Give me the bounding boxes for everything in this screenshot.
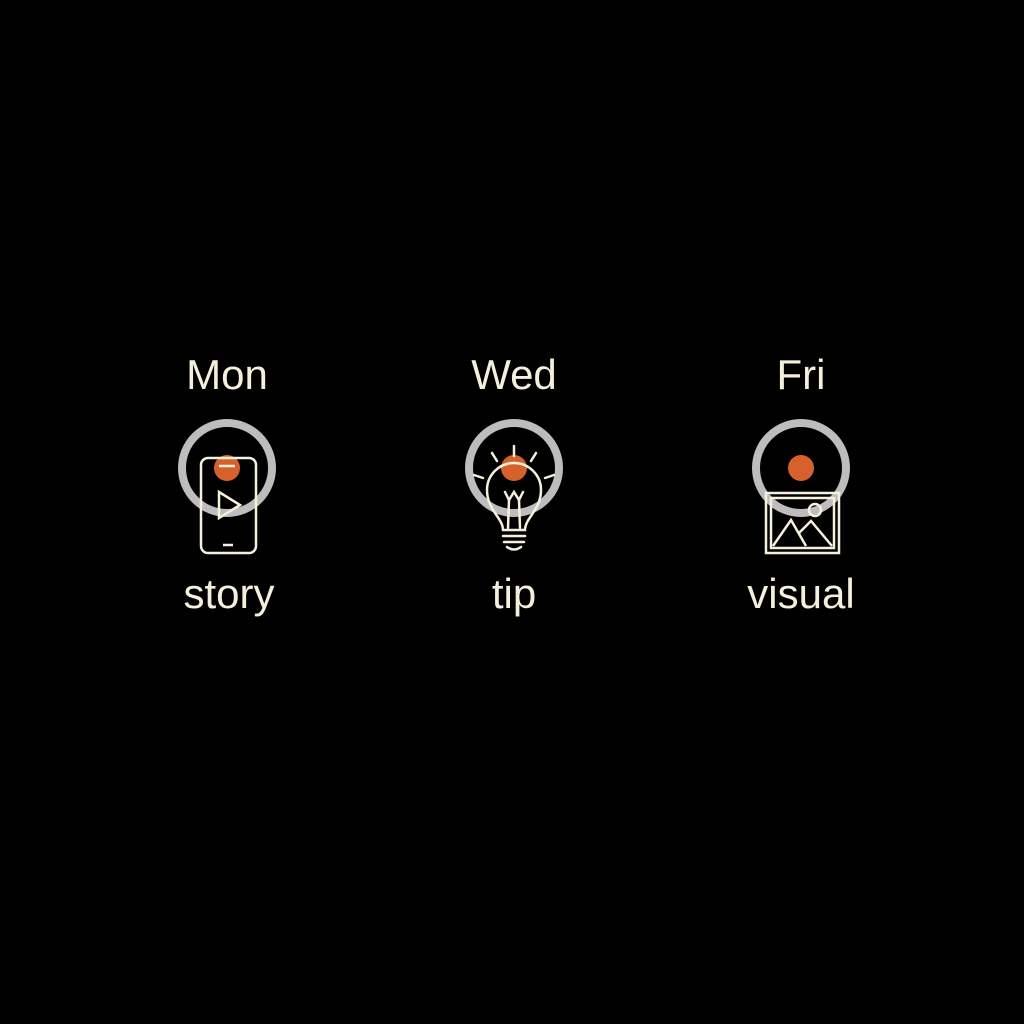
icon: ring (756, 423, 846, 513)
label: story: story (183, 570, 275, 617)
heading: Fri: Fri (777, 351, 825, 398)
label: tip: tip (492, 570, 536, 617)
icon: orange dot (788, 455, 814, 481)
icon: picture frame (766, 493, 839, 553)
label: visual: visual (747, 570, 855, 617)
icon: phone (201, 458, 256, 553)
icon: orange dot (501, 455, 527, 481)
heading: Mon: Mon (186, 351, 268, 398)
panel: Wed tip (469, 351, 559, 617)
icon: lightbulb (474, 446, 554, 550)
panel: Fri visual (747, 351, 855, 617)
heading: Wed: Wed (471, 351, 557, 398)
icon: orange dot (214, 455, 240, 481)
icon: ring (182, 423, 272, 513)
panel: Mon story (182, 351, 275, 617)
icon: ring (469, 423, 559, 513)
